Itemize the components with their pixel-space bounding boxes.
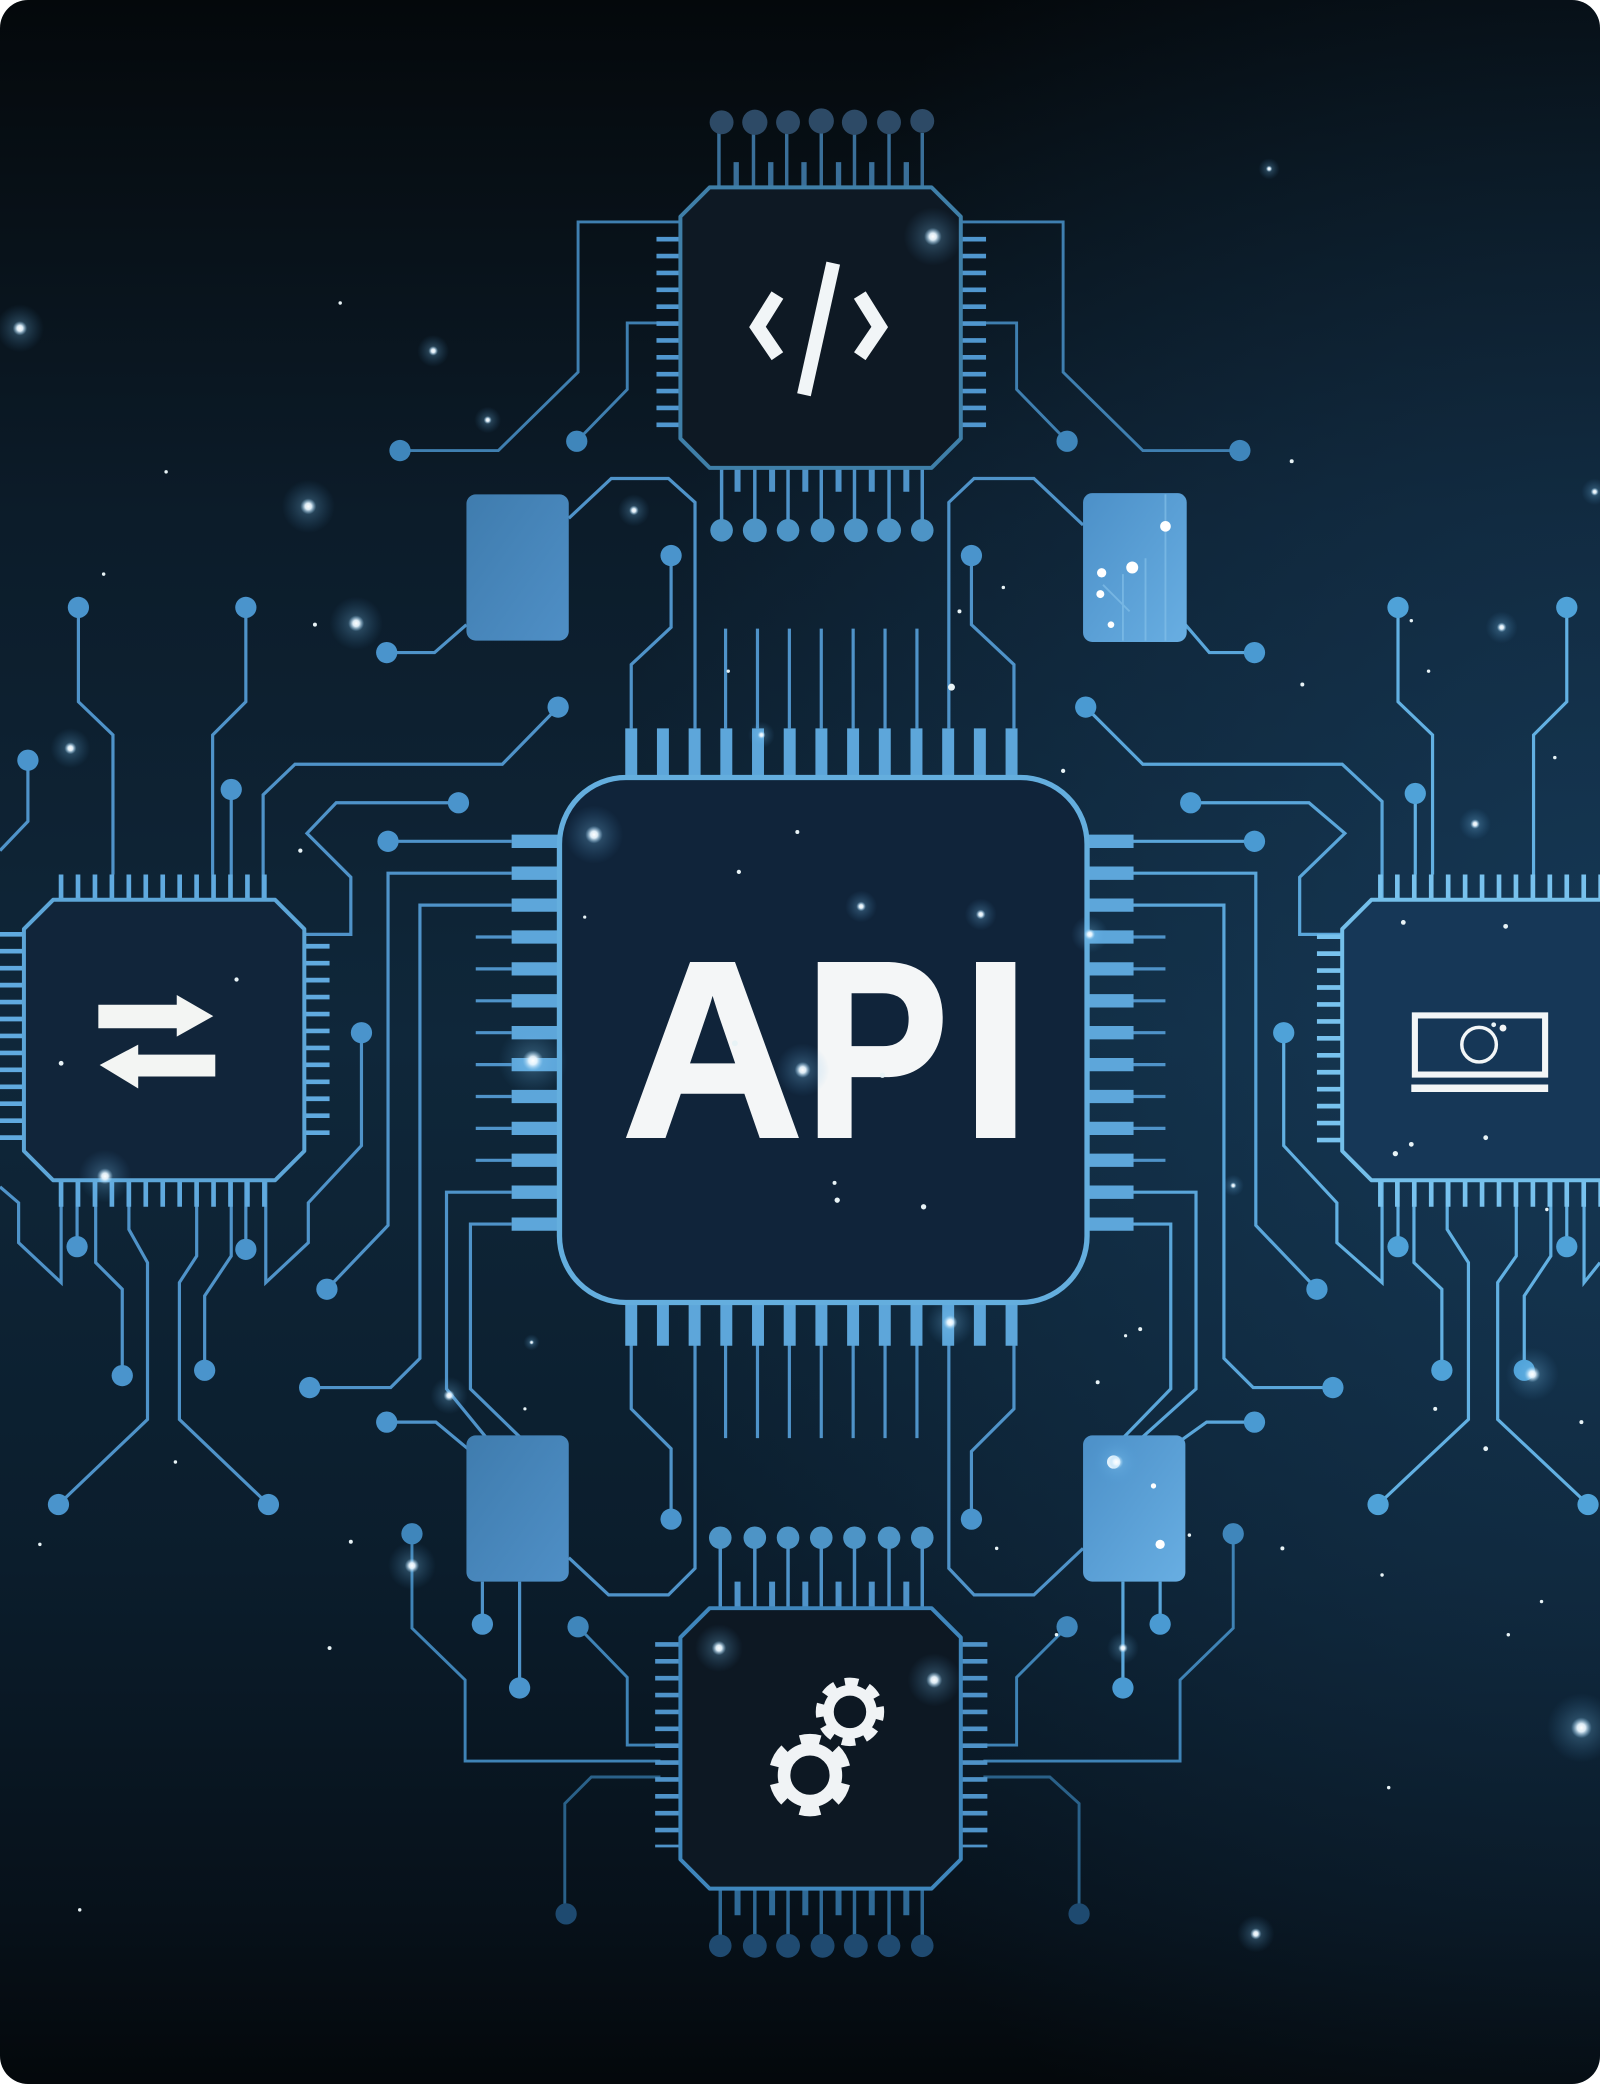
bottom module upper pins: [709, 1526, 934, 1608]
icon: code brackets: [757, 263, 880, 395]
right module traces: [1273, 597, 1600, 1515]
right module body: [1342, 900, 1600, 1180]
chip: left exchange module: [0, 597, 372, 1515]
bottom module traces: [401, 1523, 1244, 1925]
top module traces: [389, 222, 1250, 461]
top module body: [680, 187, 961, 468]
chip: right laptop module: [1273, 597, 1600, 1515]
traces: bottom of central chip: [569, 1345, 1083, 1595]
bottom module lower pins: [709, 1889, 934, 1958]
traces: right of central chip: [1075, 625, 1382, 1699]
icon: gears: [774, 1682, 880, 1811]
traces: central chip extension lines: [476, 629, 1165, 1438]
left module body: [24, 900, 304, 1180]
title: API: A: [622, 910, 803, 1190]
central API chip: [536, 753, 1110, 1324]
icon: laptop: [1411, 1015, 1548, 1088]
bottom module body: [680, 1608, 961, 1889]
chip: bottom gears module: [401, 1523, 1244, 1958]
traces: top of central chip: [569, 478, 1083, 728]
top module lower pins: [710, 468, 934, 542]
top module side pins: [668, 237, 974, 435]
central chip body: [559, 778, 1087, 1302]
title: API: P: [805, 909, 949, 1190]
component: bottom-left rectangle: [466, 1435, 569, 1582]
left module pins: [12, 887, 317, 1194]
title: API: [622, 909, 1031, 1190]
bottom module side pins: [668, 1642, 974, 1847]
chip: top code module: [389, 108, 1250, 542]
traces: left of central chip: [263, 625, 569, 1699]
right module pins: [1330, 887, 1600, 1194]
icon: exchange arrows: [98, 995, 215, 1089]
component: top-left rectangle: [466, 494, 569, 641]
top module upper pins: [710, 108, 934, 187]
central chip pins: [625, 753, 1019, 1324]
left module traces: [0, 597, 372, 1515]
title: API: I: [961, 910, 1031, 1190]
component: top-right rectangle: [1083, 493, 1187, 642]
component: bottom-right rectangle: [1083, 1435, 1185, 1582]
